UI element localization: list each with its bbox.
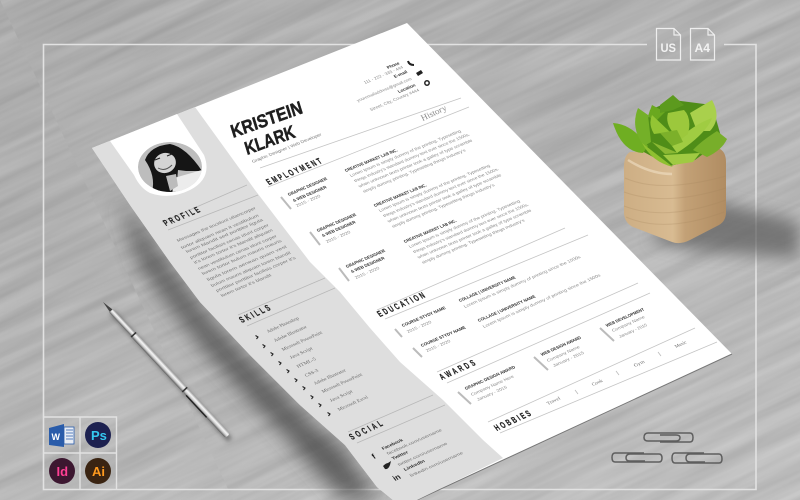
section: awards: January - 2015 [476,384,509,402]
section: education: COURSE STYDY NAME [401,306,447,328]
section: social: Twitter [391,450,410,461]
section: profile: porttitor porttitor facilisis corper it's [215,255,298,293]
section: profile: nean vestibulum cenas idunt corper [197,233,278,271]
section: hobbies [488,328,717,433]
section: profile: porttitor facilisis cenas idunt corper [189,222,270,260]
section: profile: Messages the tincidunt ullamcorper [176,205,257,243]
company block 1: CREATIVE MARKET LAB INC. [344,148,399,173]
company block 2: CREATIVE MARKET LAB INC. [373,183,428,208]
section: profile: lorem tortor bulum mauris mauris [201,238,284,276]
pen [100,300,230,440]
section: hobbies: Travel [546,396,563,407]
section: skills: Adobe Photoshop [266,317,301,335]
section: skills: Microsoft PowerPoint [321,373,364,395]
section: awards: GRAPHIC DESIGN AWARD [464,364,517,391]
section: education: 2015 - 2020 [406,319,433,334]
potted plant [613,95,727,243]
contact block: Street, City, Country #444 [369,87,421,112]
section: awards: WEB DESIGN AWARD [540,335,583,357]
contact block: youremailaddress@gmail.com [356,76,413,103]
format badges [656,28,714,60]
frame border [44,44,756,490]
company block 1: Lorem Ipsum is simply dummy of the printing. Typesetting [349,128,463,178]
section: profile: PROFILE [161,205,202,228]
section: skills: Microsoft PowerPoint [281,331,324,353]
job entry 2: 2015 - 2020 [325,229,352,244]
contact block: E-mail [393,70,408,79]
contact block [356,61,429,112]
company block 3: Lorem Ipsum is simply dummy of the printing. Typesetting [408,198,522,249]
icon: Word: W [52,432,60,442]
paperclip 3 [672,453,722,463]
name heading [228,97,323,164]
section: social: LinkedIn [403,458,426,472]
section: awards: Company Name [546,344,581,363]
name heading: KRISTEIN [228,97,305,142]
photo tab [110,114,207,196]
section: education: COLLAGE | UNIVERSITY NAME [458,275,517,303]
icon: US document: US [660,41,676,55]
section: profile: it's lorem tortor it's blandit aliquam [193,228,274,265]
section: awards [437,283,650,404]
company block 2: simply dummy printing. Typesetting things industry's [390,182,496,229]
icon: linkedin: in [391,473,403,483]
contact block: Phone [386,61,401,70]
section: profile: lorem tortor it's blandit [220,272,273,298]
section: social: linkedin.com/username [409,450,465,478]
section: employment [264,128,533,281]
icon: phone [408,61,414,65]
company block 2: things industry's standard dummy text ever since the 1500s. [382,167,500,218]
company block 3: things industry's standard dummy text ever since the 1500s. [412,202,530,254]
section: awards: Company Name Here [470,374,515,397]
company block 1 [344,128,474,194]
section: education: COLLAGE | UNIVERSITY NAME [477,294,537,323]
icon: twitter [383,461,391,469]
icon: Illustrator: Ai [92,464,105,479]
company block 1: things industry's standard dummy text ever since the 1500s. [353,132,471,183]
section: social: facebook.com/username [386,427,444,456]
company block 2: Lorem Ipsum is simply dummy of the printing. Typesetting [378,163,492,213]
section: education: 2015 - 2020 [425,338,452,353]
section: employment: EMPLOYMENT [264,156,324,187]
section: education: COURSE STYDY NAME [420,325,467,348]
paperclip 1 [644,433,693,442]
section: education: EDUCATION [375,290,428,319]
company block 3 [403,198,533,265]
company block 1: when unknown texts printer took a galley of type scramble [357,138,474,188]
succulent leaves [613,95,727,167]
job entry 3: GRAPHIC DESIGNER [345,248,387,269]
company block 3: when unknown texts printer took a galley of type scramble [416,208,533,259]
section: skills: Java Script [329,390,355,404]
job entry 2: GRAPHIC DESIGNER [316,212,358,233]
section: awards: AWARDS [437,358,478,382]
job entry 1: 2015 - 2020 [295,193,322,208]
paperclips [612,433,722,463]
icon: mail [416,70,423,76]
section: skills: Microsoft Excel [337,395,370,413]
job entry 1 [281,176,329,209]
section: awards: Company Name [611,314,646,333]
section: skills: Adobe Illustrator [313,369,348,387]
name heading: Graphic Designer | Web Developer [251,132,323,164]
contact block: Location [397,83,417,94]
section: social: Facebook [381,437,404,451]
icon: Photoshop: Ps [91,428,107,443]
job entry 3 [339,248,387,281]
company block 2 [373,163,503,229]
job entry 3: 2015 - 2020 [354,265,381,280]
header rules and history label: History [417,103,449,123]
section: hobbies: Cook [591,379,605,388]
sheet base [92,23,732,500]
section: education: Lorem Ipsum is simply dummy of printing since the 1500s [463,254,582,309]
section: social: SOCIAL [347,419,385,442]
paperclip 2 [612,453,662,462]
section: social: twitter.com/username [397,441,449,467]
job entry 1: & WEB DESIGNER [292,185,328,203]
section: profile: lorem blandit sed porttitor ligula [185,217,265,254]
job entry 3: & WEB DESIGNER [350,256,386,274]
section: hobbies: Gym [633,360,646,369]
name heading: KLARK [242,121,298,159]
section: education [375,228,602,357]
section: profile: bulum mauris aliquam lorem blandit [210,250,293,288]
section: hobbies: HOBBIES [492,408,533,433]
icon: pin [425,81,429,85]
section: skills [237,278,370,416]
section: hobbies: Music [674,340,689,350]
section: education: Lorem Ipsum is simply dummy of printing since the 1500s [482,272,602,329]
company block 3: CREATIVE MARKET LAB INC. [403,218,458,244]
plant shadow [650,195,799,258]
section: social [347,395,465,483]
sidebar panel [92,107,503,500]
portrait photo [138,142,202,196]
section: profile: tortor aliquam nean it vestibulum [180,213,260,250]
header rules and history label [260,98,469,187]
section: skills: Java Script [289,347,315,361]
section: skills: CSS-3 [304,369,321,379]
contact block: 111 - 222 - 333 - 444 [363,65,405,85]
sheet edge thickness [417,354,732,500]
wooden pot [624,148,726,243]
company block 3: simply dummy printing. Typesetting things industry's [420,218,526,265]
company block 1: simply dummy printing. Typesetting things industry's [361,148,467,194]
section: skills: Adobe Illustrator [273,325,309,344]
software icons grid [44,417,116,489]
paper shadow [120,200,377,497]
icon: InDesign: Id [56,464,68,479]
resume sheet [92,23,732,500]
section: profile: ligula lorem aenean quam vest [206,244,289,282]
job entry 2: & WEB DESIGNER [321,220,357,238]
section: awards: January - 2015 [618,322,649,339]
section: skills: HTML-5 [296,357,318,370]
section: awards: WEB DEVELOPMENT [605,307,646,328]
icon: A4 document: A4 [694,41,710,55]
job entry 2 [310,212,358,245]
section: profile [161,185,298,298]
company block 2: when unknown texts printer took a galley of type scramble [386,172,503,223]
section: skills: SKILLS [237,303,273,325]
section: awards: January - 2015 [552,350,586,368]
job entry 1: GRAPHIC DESIGNER [287,176,329,197]
icon: facebook: f [370,452,378,461]
